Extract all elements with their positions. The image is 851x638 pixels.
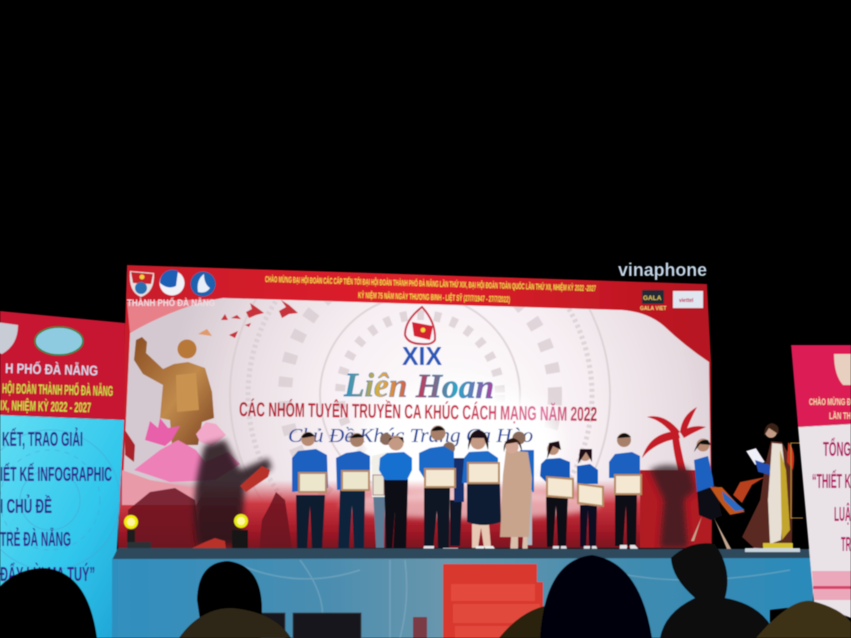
left banner red header (0, 311, 125, 420)
left banner logo: youth badge (0, 322, 18, 354)
backdrop light body (122, 298, 711, 505)
audience head with cap centre-left (179, 561, 291, 638)
main LED backdrop (118, 205, 712, 585)
header line 2: KỶ NIỆM 75 NĂM NGÀY THƯƠNG BINH - LIỆT SỸ (27/7/1947 - 27/7/2022) (358, 289, 510, 304)
man behind in white shirt (372, 433, 392, 548)
stage light left (124, 515, 151, 554)
header message (265, 273, 596, 304)
festival theme: Chủ Đề Khúc Tráng Ca Hào (288, 425, 533, 447)
gold backdrop trim (790, 443, 803, 518)
MC in ao dai (742, 423, 803, 555)
MC woman in beige dress (500, 438, 532, 553)
blurred dancer silhouette (194, 440, 272, 545)
bottle on stage front (413, 617, 427, 638)
Gala Viet logo: GALA (643, 295, 662, 302)
stage white front trim right (745, 548, 800, 552)
right banner youth badge (834, 354, 851, 385)
left banner city name: H PHỐ ĐÀ NẴNG (5, 359, 98, 378)
man behind 2 (443, 442, 464, 546)
left banner congress line 2: IX, NHIỆM KỲ 2022 - 2027 (0, 396, 91, 415)
left banner light-blue body (0, 415, 124, 638)
audience hat far right (756, 601, 851, 638)
performer walking with flag (691, 438, 765, 552)
certificate 2 (341, 470, 370, 491)
right banner headline (812, 437, 851, 556)
recipient 3 (419, 426, 459, 553)
mandala drum pattern (229, 299, 611, 500)
performers and award recipients (124, 423, 803, 555)
man behind 3 (512, 432, 534, 545)
audience head far left (0, 568, 97, 638)
headline line 1: KẾT, TRAO GIẢI (2, 428, 83, 451)
audience hat near steps (499, 606, 560, 638)
certificate 7 (614, 474, 642, 495)
orange and blue flag bundle (710, 487, 745, 515)
stage photo scene (0, 262, 851, 638)
vinaphone sponsor logo: vinaphone (618, 259, 707, 280)
certificate 1 (298, 472, 327, 493)
red palm tree (640, 407, 711, 548)
woman recipient in black skirt (462, 430, 501, 553)
woman recipient 6 (577, 449, 604, 552)
sponsor logos (640, 290, 703, 312)
presenter in blue polo (379, 436, 412, 552)
clothes pile on stage (190, 538, 226, 549)
backdrop red frame (118, 265, 712, 548)
flying doves (198, 300, 298, 338)
student association badge (160, 270, 184, 296)
woman recipient 5 (540, 441, 574, 552)
stage fabric folds (240, 560, 790, 638)
red object held by dancer (240, 466, 270, 492)
Ho Chi Minh statue (134, 337, 214, 445)
left banner (0, 311, 125, 638)
stage light right (232, 514, 248, 550)
stage-light glare (360, 385, 560, 505)
certificate 3 (424, 468, 456, 488)
white shoes 7 (619, 545, 641, 552)
left pink corner (127, 299, 214, 333)
festival title script: Liên Hoan (343, 367, 494, 406)
centre floor highlight (340, 491, 600, 519)
recipient 7 (609, 433, 642, 552)
stage platform (112, 548, 813, 638)
certificate 6 (577, 483, 604, 507)
XIX numeral: XIX (402, 341, 443, 371)
headline line 3: I CHỦ ĐỀ (0, 494, 52, 518)
left banner: HỘI ĐOÀN THÀNH PHỐ ĐÀ NẴNG (2, 379, 113, 399)
city caption: THÀNH PHỐ ĐÀ NẴNG (127, 297, 215, 309)
right banner (791, 345, 851, 618)
star (421, 328, 425, 332)
right banner pink stripes (812, 571, 851, 600)
pink lotus flowers (122, 418, 240, 505)
recipient 1 (292, 432, 328, 551)
stage deck (112, 548, 813, 560)
red floor band (118, 480, 712, 548)
red and yellow flag (733, 477, 765, 503)
left banner mandala (0, 430, 120, 570)
dark palm shadow (650, 465, 695, 548)
white shoes 5 (552, 546, 568, 552)
stage blue skirt (112, 558, 813, 638)
youth federation badge (190, 272, 216, 296)
torch flame (405, 307, 435, 344)
Gala Viet logo: GALA VIET (640, 306, 666, 312)
Viettel logo: viettel (679, 298, 694, 304)
organisation logos (127, 270, 216, 309)
youth union badge (130, 271, 154, 297)
audience silhouettes (0, 543, 851, 638)
recipient 2 (336, 433, 370, 551)
Gala Viet logo (640, 290, 666, 312)
white shoes 6 (583, 546, 599, 552)
white sneakers (422, 546, 459, 553)
right banner white body (798, 424, 851, 618)
audience head centre-right (540, 555, 652, 638)
left banner logo: city school emblem (35, 327, 83, 355)
white shoes (475, 546, 498, 553)
headline line 2: IẾT KẾ INFOGRAPHIC (0, 463, 112, 486)
red stage steps (443, 564, 543, 638)
audience head right (660, 543, 777, 638)
festival subtitle: CÁC NHÓM TUYÊN TRUYỀN CA KHÚC CÁCH MẠNG NĂM 2022 (239, 397, 597, 426)
left banner headline (0, 428, 112, 586)
headline line 4: TRẺ ĐÀ NẴNG (0, 528, 71, 551)
speaker boxes (261, 613, 361, 638)
dark floor silhouettes (128, 488, 292, 548)
certificate 4 (467, 462, 500, 484)
certificate behind (373, 475, 384, 495)
certificate 5 (546, 476, 574, 499)
right banner red header (791, 345, 851, 427)
XIX congress logo (402, 307, 443, 371)
headline line 5: ĐẨY LÙI MA TUÝ” (0, 562, 95, 586)
flag (412, 322, 433, 340)
